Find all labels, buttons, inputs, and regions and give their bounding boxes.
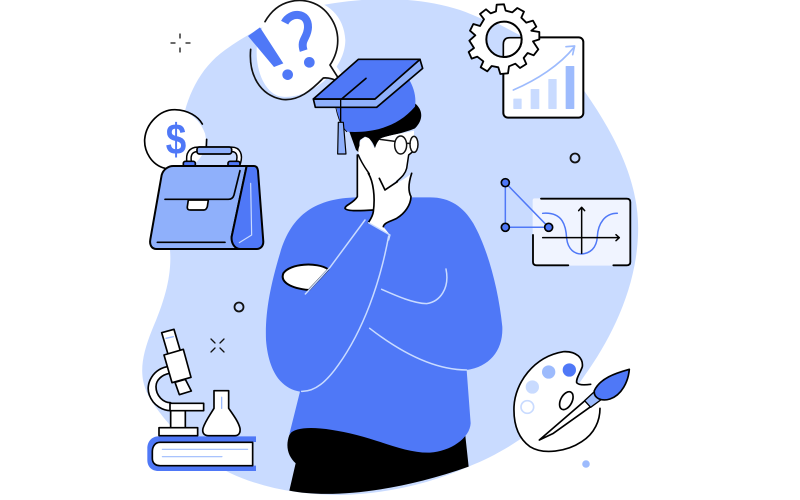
book: [147, 436, 256, 471]
arm gap: [283, 265, 328, 290]
icon: blue dot: [582, 460, 590, 468]
speech bubble: [248, 0, 346, 100]
person: torso and arms: [266, 197, 502, 494]
trousers: [287, 423, 469, 494]
icon: gear and chart panel: [469, 4, 583, 118]
bag side: [232, 166, 263, 249]
background blob: [142, 0, 638, 495]
icon: briefcase and dollar coin: [145, 110, 263, 249]
hand on chin: [368, 173, 412, 235]
sweater: [266, 197, 502, 453]
chart panel: [503, 37, 583, 118]
icon: palette and brush: [514, 352, 629, 451]
curve: [543, 213, 617, 254]
handle: [189, 149, 239, 163]
palette: [514, 352, 600, 451]
flask: [203, 391, 240, 436]
icon: sparkle top left: [171, 34, 190, 52]
triangle nodes: [505, 183, 549, 227]
graduation cap: [313, 59, 423, 154]
microscope: [148, 329, 204, 436]
dollar coin: [145, 110, 206, 168]
question mark: [285, 15, 315, 68]
icon: small circle left: [234, 302, 244, 312]
hair: [349, 103, 421, 154]
icon: briefcase and dollar coin: $: [166, 116, 186, 164]
person: head and hand: [345, 103, 421, 240]
icon: sparkle lower left: [211, 339, 224, 352]
flap and clasp: [187, 200, 208, 210]
face: [358, 131, 414, 190]
neck: [345, 155, 383, 211]
paint dots: [521, 363, 576, 413]
glasses: [380, 136, 418, 154]
icon: small circle right: [570, 154, 580, 162]
trend arrow: [513, 46, 575, 90]
axes: [543, 207, 619, 253]
sweater fold lines: [302, 220, 467, 391]
gear: [469, 4, 539, 74]
brush: [539, 401, 591, 440]
exclamation mark: [248, 27, 293, 80]
bars: [513, 66, 574, 109]
icon: function graph board: [501, 179, 631, 266]
icon: microscope, flask and book: [147, 329, 256, 471]
bag body: [150, 166, 247, 249]
